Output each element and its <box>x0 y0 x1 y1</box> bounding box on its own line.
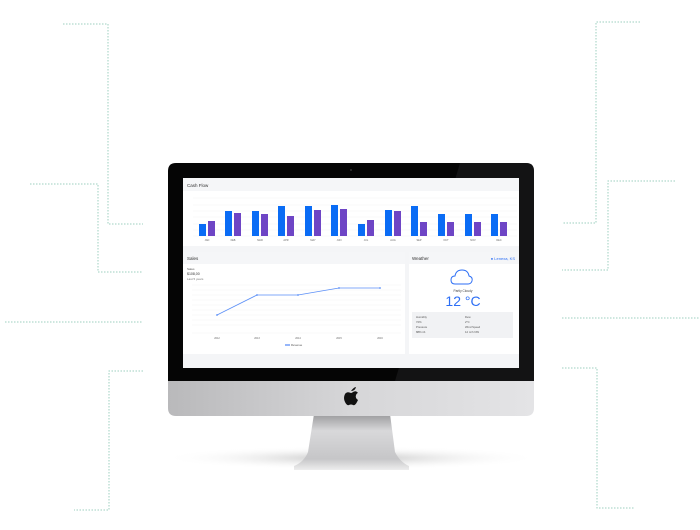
panel: sales: Sales <box>187 256 199 261</box>
panel: weather: Partly Cloudy <box>454 289 473 293</box>
panel: weather: ● Lenexa, KS <box>491 256 515 261</box>
bar chart: AUG <box>390 239 396 242</box>
panel: weather <box>409 252 519 354</box>
panel: sales: $108,00 <box>187 272 200 276</box>
bar chart: FEB <box>231 239 236 242</box>
line chart: Revenue <box>291 343 303 347</box>
panel: weather: Pressure <box>416 325 428 329</box>
bar chart: JAN <box>205 239 210 242</box>
icon: apple logo <box>344 387 358 405</box>
bezel <box>168 163 534 381</box>
bar chart: JUN <box>337 239 342 242</box>
bar chart: APR <box>283 239 289 242</box>
panel: sales <box>183 252 405 354</box>
line chart: 2014 <box>295 337 301 340</box>
panel: weather: 72% <box>416 320 422 324</box>
panel: weather: Wind Speed <box>465 325 481 329</box>
bar chart: MAR <box>257 239 263 242</box>
line chart: 2013 <box>254 337 260 340</box>
icon: cloud <box>451 270 472 284</box>
panel: sales: Last 5 years <box>187 277 204 281</box>
line chart: 2012 <box>214 337 220 340</box>
panel: cash flow: Cash Flow <box>187 183 209 188</box>
chin <box>168 380 534 416</box>
panel: sales: Sales <box>187 267 195 271</box>
panel: weather: Humidity <box>416 315 427 319</box>
bar chart: DEC <box>496 239 502 242</box>
screen <box>183 178 519 368</box>
panel: weather: 2°C <box>465 320 470 324</box>
stand <box>294 414 409 470</box>
bar chart: OCT <box>443 239 449 242</box>
line chart <box>192 285 401 347</box>
line chart: 2015 <box>336 337 342 340</box>
panel: weather: 12 °C <box>445 293 481 309</box>
bar chart: NOV <box>470 239 476 242</box>
bar chart: JUL <box>364 239 369 242</box>
bar chart: SEP <box>416 239 422 242</box>
panel: weather: 12 m/h NW <box>465 330 479 334</box>
panel: weather: Dew <box>465 315 472 319</box>
panel: weather: 888 mb <box>416 330 426 334</box>
panel: cash flow <box>183 178 519 246</box>
line chart: 2016 <box>377 337 383 340</box>
bar chart: MAY <box>310 239 316 242</box>
monitor <box>161 163 541 470</box>
panel: weather: Weather <box>412 256 429 261</box>
bar chart <box>199 205 507 242</box>
